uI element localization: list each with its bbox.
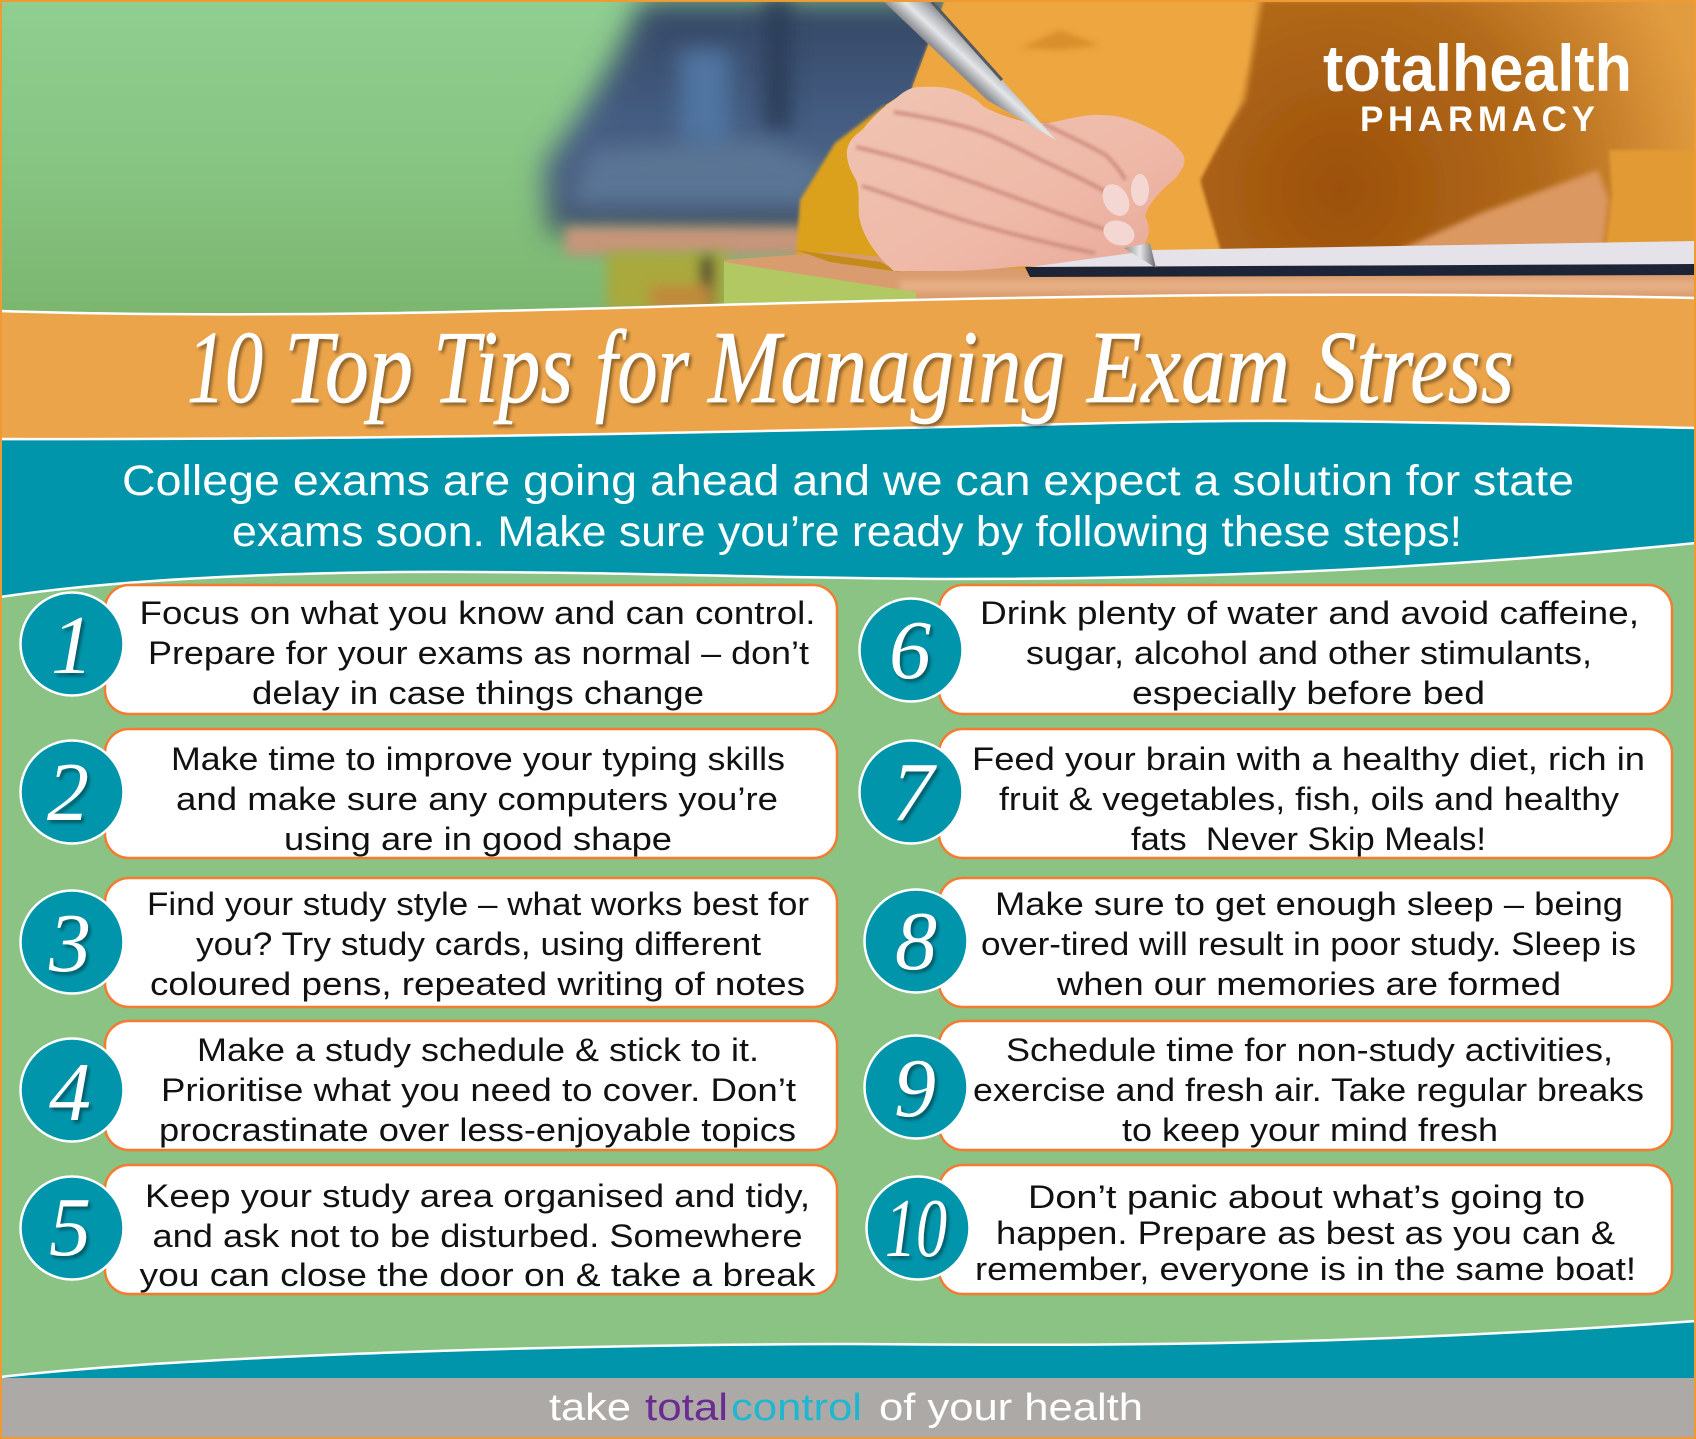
mustard cuff [796,105,905,268]
intro text [122,457,1574,556]
text 8: when our memories are formed [1056,966,1561,1002]
text 7: Feed your brain with a healthy diet, rich in [972,741,1645,777]
tip 6 [860,585,1672,714]
sweater dark torso [1175,0,1696,262]
tip 9 [864,1021,1672,1150]
text 6: Drink plenty of water and avoid caffeine, [980,595,1639,631]
lime desk corner [724,262,916,310]
desk highlight [900,280,1696,292]
number badge 6 [860,598,962,702]
text 3: you? Try study cards, using different [196,926,761,962]
text 3: coloured pens, repeated writing of notes [150,966,805,1002]
text 2 [171,741,785,857]
tip 7 [860,729,1672,858]
footer tagline: control [731,1387,862,1429]
hero photo: student writing at a desk [0,0,1696,325]
sweater fold [1020,30,1100,50]
title [187,310,1514,425]
card 4 [105,1021,837,1150]
title: Tips [433,310,573,425]
text 9: exercise and fresh air. Take regular breaks [973,1072,1644,1108]
number badge 1: 1 [51,599,93,692]
green wall background [0,0,1000,325]
right sleeve [1606,150,1696,246]
number badge 2: 2 [47,746,89,839]
text 5: and ask not to be disturbed. Somewhere [152,1218,802,1254]
text 2: and make sure any computers you’re [176,781,778,817]
number badge 6: 6 [889,604,931,697]
text 3: Find your study style – what works best for [147,886,809,922]
text 10: happen. Prepare as best as you can & [996,1215,1615,1251]
number badge 7 [860,740,962,844]
grey footer bar [0,1378,1696,1439]
pen body [882,0,1056,140]
pen tip [1124,243,1156,268]
number badge 10: 10 [885,1182,947,1275]
text 1: Focus on what you know and can control. [140,595,816,631]
card 10 [939,1165,1672,1294]
tip 2 [20,729,837,858]
intro text: exams soon. Make sure you’re ready by following these steps! [232,508,1462,556]
title: Managing [706,310,1065,425]
card 1 [105,585,837,714]
number badge 9: 9 [894,1042,936,1135]
text 4: procrastinate over less-enjoyable topics [159,1112,796,1148]
text 4: Prioritise what you need to cover. Don’t [161,1072,796,1108]
tip 3 [20,878,837,1007]
logo subtitle: PHARMACY [1360,100,1595,139]
tip 1 [20,585,837,714]
pen clip [932,2,1002,80]
text 9 [973,1032,1644,1148]
teal bottom wave [0,1321,1696,1390]
number badge 2 [20,740,124,844]
logo wordmark: totalhealth [1323,31,1632,105]
blurred forearm [1399,170,1609,250]
text 4: Make a study schedule & stick to it. [197,1032,759,1068]
card 9 [939,1021,1672,1150]
card 5 [105,1165,837,1294]
text 6 [980,595,1639,711]
card 3 [105,878,837,1007]
tip 8 [864,878,1672,1007]
finger creases [856,112,1125,253]
text 6: sugar, alcohol and other stimulants, [1026,635,1592,671]
text 1 [140,595,816,711]
intro text: College exams are going ahead and we can expect a solution for state [122,457,1574,505]
notebook page [1030,241,1696,267]
text 8 [981,886,1636,1002]
text 9: to keep your mind fresh [1122,1112,1498,1148]
notebook dark cover [1025,264,1696,277]
number badge 3: 3 [48,897,91,990]
tip 5 [20,1165,837,1294]
number badge 4 [20,1038,124,1142]
text 9: Schedule time for non-study activities, [1006,1032,1613,1068]
hand [847,87,1185,271]
text 10: Don’t panic about what’s going to [1028,1179,1585,1215]
title: Top [284,310,413,425]
text 5 [140,1178,817,1293]
text 7: fats Never Skip Meals! [1131,821,1486,857]
text 5: Keep your study area organised and tidy, [145,1178,810,1214]
footer tagline [549,1387,1143,1429]
footer tagline: of your health [879,1387,1143,1429]
text 7 [972,741,1645,857]
teal intro band [0,421,1696,620]
orange sweater base [880,0,1696,290]
text 8: Make sure to get enough sleep – being [995,886,1623,922]
blurred person in background [543,0,970,238]
card 8 [939,878,1672,1007]
text 7: fruit & vegetables, fish, oils and healthy [999,781,1619,817]
blurred desk behind [565,227,815,255]
number badge 5 [20,1176,124,1280]
title: 10 [187,310,263,425]
green content background [0,543,1696,1400]
number badge 8: 8 [895,895,937,988]
orange title band [0,295,1696,450]
text 1: delay in case things change [252,675,704,711]
title: Stress [1314,310,1514,425]
text 10 [975,1179,1636,1287]
card 7 [939,729,1672,858]
number badge 9 [864,1036,968,1138]
text 2: using are in good shape [284,821,672,857]
blurred chair legs [607,252,727,312]
number badge 1 [20,592,124,696]
number badge 4: 4 [49,1046,91,1139]
card 2 [105,729,837,858]
text 2: Make time to improve your typing skills [171,741,785,777]
footer tagline: total [645,1387,728,1429]
tip 10 [866,1165,1672,1294]
title: for [595,310,689,425]
number badge 3 [20,890,124,994]
title: Exam [1085,310,1290,425]
jacket folds [570,0,830,205]
sweater light shoulder [912,0,1256,255]
logo [1323,31,1632,139]
card 6 [939,585,1672,714]
text 4 [159,1032,796,1148]
text 8: over-tired will result in poor study. Sleep is [981,926,1636,962]
desk surface [724,252,1696,310]
number badge 8 [864,890,968,992]
tip 4 [20,1021,837,1150]
fingernails [1097,174,1149,250]
number badge 7: 7 [892,746,937,839]
text 3 [147,886,809,1002]
text 1: Prepare for your exams as normal – don’t [148,635,809,671]
number badge 5: 5 [49,1181,91,1274]
text 5: you can close the door on & take a break [140,1257,817,1293]
cuff bottom edge [796,250,900,272]
text 10: remember, everyone is in the same boat! [975,1251,1636,1287]
footer tagline: take [549,1387,631,1429]
text 6: especially before bed [1132,675,1485,711]
